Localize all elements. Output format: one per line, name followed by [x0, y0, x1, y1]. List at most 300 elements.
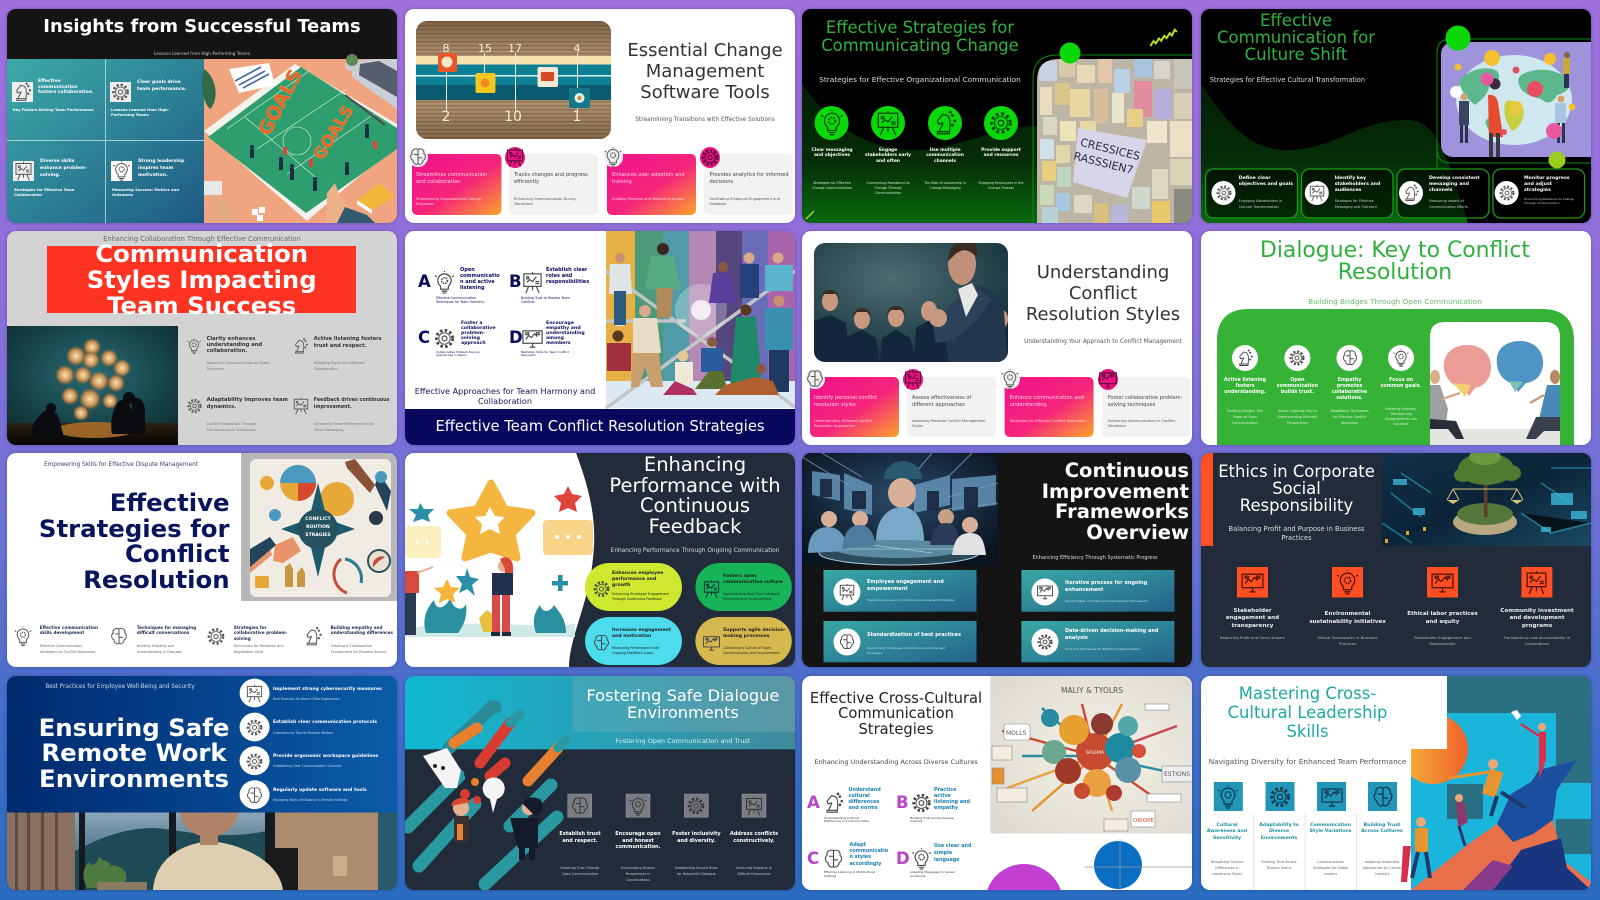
card text: styles: Identify personal conflict: [814, 394, 877, 400]
item: feedback: improvement.: [314, 405, 352, 410]
panel: Fostering Safe Dialogue Environments: for Respectful Dialogue: [677, 872, 716, 876]
image: tree on scales over circuit board: [1201, 453, 1591, 667]
card text: styles: [814, 394, 877, 428]
image: timeline on wooden board: [412, 21, 793, 215]
pill: culture: Implementing Real-Time Feedback: [723, 592, 780, 596]
subtitle: Enhancing Efficiency Through Systematic Progress: [1033, 554, 1157, 560]
item sublabels: The Role of Leadership in: [924, 180, 966, 184]
card text: communication: and collaboration: [416, 178, 460, 184]
item B: empathy: [934, 805, 958, 811]
card text: effectiveness: Assess effectiveness of: [912, 394, 971, 400]
item: channels: Use multiple: [929, 148, 961, 152]
item: clarity: understanding and: [207, 342, 262, 348]
item: clarity: [187, 336, 270, 371]
item sublabels: Communication: [875, 190, 901, 194]
card text: collaboration: Enhancing Communication in Conflict: [1108, 418, 1175, 422]
image: timeline on wooden board: 2: [442, 109, 450, 125]
item: community: and development: [1510, 615, 1564, 621]
item: empathy: Building empathy and: [331, 625, 383, 630]
subtitle: Building Bridges Through Open Communication: [1308, 296, 1482, 306]
item D: Mediation Skills for Team Conflict: [521, 350, 569, 354]
title: [34, 714, 234, 791]
box: data: Tools and Techniques for Effective Implementation: [1065, 647, 1141, 651]
title: Software Tools: [640, 82, 770, 103]
title: [1201, 684, 1414, 741]
title on red box: Team Success: [107, 291, 296, 320]
item: inclusivity: [666, 831, 726, 844]
panel: Fostering Safe Dialogue Environments: Conversations: [626, 878, 650, 882]
item: clarity: Impact of Communication on Team: [207, 361, 269, 365]
item: style variations: Communication: [1310, 822, 1351, 828]
item: common goals: Focus on: [1389, 378, 1413, 383]
item: adaptability: [187, 397, 288, 432]
item B: Building Trust Across Diverse: [910, 816, 953, 820]
item: skills: skills development: [40, 630, 84, 635]
icons on orange squares: [1201, 567, 1591, 598]
item: labor: and equity: [1426, 618, 1459, 624]
item: support: Provide support: [981, 148, 1021, 152]
item: diverse skills: Collaboration: [14, 193, 42, 197]
panel: Ethics in Corporate Social Responsibility: Balancing Profit and Social Impact: [1220, 634, 1285, 640]
image: abstract capsules and two people talking: [405, 676, 795, 890]
panel: Effective Communication for Culture Shift: Cultural Transformation: [1239, 205, 1279, 209]
box: data: Data-driven decision-making and: [1065, 628, 1158, 634]
item A: and norms: [848, 805, 878, 811]
card text: tracking: [514, 172, 588, 206]
panel: Mastering Cross-Cultural Leadership Skills: Navigating Cultural: [1211, 860, 1243, 864]
title: Improvement: [1042, 480, 1189, 502]
panel: Essential Change Management Software Tools: [405, 9, 795, 223]
item: cybersecurity: Best Practices for Home Office Ergonomics: [273, 697, 339, 701]
image: light bulbs installation: [7, 326, 178, 445]
icons on gray squares: [405, 794, 795, 818]
item: ergonomics: Establishing Clear Communication Channels: [273, 764, 341, 768]
title: [1201, 463, 1392, 515]
item A: n and active: [460, 279, 495, 285]
item B: Establish clear: [546, 267, 587, 273]
image: conflict resolution collage: CONFLICT: [305, 516, 332, 522]
box: messaging: messaging and: [1429, 182, 1469, 187]
card text: communication: Streamlining Organizational Change: [416, 196, 481, 200]
title: Understanding: [1037, 262, 1169, 283]
item sublabels: Change Through: [874, 186, 902, 190]
title: Resolution: [83, 564, 230, 594]
item: conflicts: Address conflicts: [730, 831, 778, 837]
title: Feedback: [649, 515, 741, 538]
image: timeline on wooden board: 1: [573, 109, 581, 125]
icons on green circles: [820, 110, 1012, 136]
image: conflict resolution collage: [7, 453, 397, 667]
box: monitoring: [1524, 176, 1574, 205]
item: labor: [1397, 611, 1488, 626]
title: Conflict: [125, 539, 230, 568]
subtitle: Best Practices for Employee Well-Being and Security: [45, 684, 195, 690]
box: iteration: [1065, 571, 1148, 604]
image: teal panel and goals football board: GOALS: [254, 66, 307, 139]
item: clear goals: Performing Teams: [111, 113, 149, 117]
title: Strategies for: [39, 514, 230, 542]
item: software: [273, 788, 367, 803]
title: Enhancing: [644, 453, 746, 476]
item: leadership: Outcomes: [112, 193, 133, 197]
title: Overview: [1086, 520, 1189, 544]
box: standardization: Processes: [867, 651, 882, 655]
title: Resolution Styles: [1026, 304, 1180, 325]
item: clarity: Dynamics: [207, 367, 224, 371]
item: honesty: Encourage open: [615, 831, 661, 837]
item: trust: [1267, 378, 1327, 396]
item: community: programs: [1522, 622, 1552, 628]
panel: Mastering Cross-Cultural Leadership Skills: Differences in: [1215, 866, 1239, 870]
item B: Building Trust to Resolve Team: [521, 296, 570, 300]
item: messaging: Clear messaging: [811, 148, 853, 152]
item: conversations: difficult conversations: [137, 630, 189, 635]
panel: Effective Strategies for Communicating Change: [802, 9, 1192, 223]
item D: Audiences: [910, 874, 926, 878]
item B: roles and: [546, 273, 572, 279]
item B: active: [934, 793, 951, 799]
panel: Dialogue: Key to Conflict Resolution: Perspectives: [1287, 421, 1308, 425]
item C: problem-: [461, 331, 485, 336]
box: messaging: channels: [1429, 188, 1453, 193]
pill: engagement: [589, 625, 679, 661]
card text: adoption: training: [612, 178, 632, 184]
card text: communication: Enhance communication and: [1010, 394, 1084, 400]
image: timeline on wooden board: 17: [508, 42, 522, 55]
box: messaging: Develop consistent: [1429, 176, 1480, 181]
item D: [509, 320, 585, 357]
image: timeline on wooden board: 4: [574, 42, 580, 55]
box: iteration: enhancement: [1065, 587, 1103, 593]
item C: Foster a: [461, 321, 483, 326]
item: diverse skills: Strategies for Effective Team: [14, 188, 74, 192]
image: people climbing geometric mountain: [1201, 676, 1591, 890]
panel: Effective Communication for Culture Shift: Measuring Impact of: [1429, 199, 1464, 203]
item B: [509, 267, 590, 304]
title on red box: Communication: [95, 239, 308, 268]
title: [1026, 262, 1180, 325]
title: Effective Cross-Cultural: [810, 690, 982, 706]
item: adaptability: Conflict Resolution Through: [207, 422, 256, 426]
card text: effectiveness: Styles: [912, 424, 923, 428]
item D: empathy and: [546, 326, 581, 331]
item: protocols: Cybersecurity Tips for Remote Workers: [273, 731, 333, 735]
panel: Mastering Cross-Cultural Leadership Skills: Leaders: [1324, 872, 1337, 876]
item: stakeholders: and often: [876, 159, 900, 164]
subtitle: Balancing Profit and Purpose in Business: [1228, 525, 1364, 533]
box: monitoring: Monitor progress: [1524, 176, 1570, 181]
panel: Ethics in Corporate Social Responsibility: Stakeholder Engagement and: [1414, 634, 1471, 640]
box: engagement: Measuring Success in Continuous Improvement Initiatives: [867, 598, 954, 602]
card text: styles: Resolution Approaches: [814, 424, 855, 428]
title: [627, 40, 783, 103]
item C: approach: [461, 341, 486, 346]
panel: Communication Styles Impacting Team Success: [7, 231, 397, 445]
panel: Dialogue: Key to Conflict Resolution: Communication: [1232, 421, 1258, 425]
item: leadership: Strong leadership: [138, 159, 184, 164]
item sublabels: Strategies for Effective: [813, 180, 851, 184]
item: empathy: [1320, 378, 1380, 402]
box: standardization: Standardization of best practices: [867, 632, 961, 638]
item: adaptability: [1253, 822, 1305, 842]
item: listening: fosters: [1235, 384, 1254, 389]
panel: Mastering Cross-Cultural Leadership Skills: Adapting Leadership: [1365, 860, 1399, 864]
item: clear goals: Clear goals drive: [137, 80, 181, 85]
title: [1201, 240, 1589, 283]
panel: Dialogue: Key to Conflict Resolution: Disagreements into: [1385, 417, 1417, 421]
item: environment: Environmental: [1325, 611, 1370, 617]
item: clarity: collaboration.: [207, 348, 247, 354]
item D: D: [896, 848, 910, 868]
item sublabels: [812, 180, 1024, 194]
item C: n styles: [850, 854, 871, 860]
panel: Mastering Cross-Cultural Leadership Skills: Contexts: [1374, 872, 1390, 876]
item sublabels: Engaging Employees in the: [978, 180, 1024, 184]
item: skills: Effective Communication: [40, 644, 82, 648]
item: protocols: [273, 720, 377, 736]
subtitle: Streamlining Transitions with Effective Solutions: [635, 117, 775, 123]
panel: Effective Communication for Culture Shift: Messaging and Outreach: [1335, 205, 1377, 209]
panel: Effective Communication for Culture Shift: Overcoming Resistance to Change: [1524, 197, 1574, 201]
item: ergonomics: Provide ergonomic workspace guidelines: [273, 754, 378, 759]
card text: communication: [1010, 394, 1086, 422]
item C: communicatio: [850, 848, 888, 854]
image: green panel and speech bubbles: [1201, 231, 1591, 445]
item: community: Community investment: [1500, 608, 1574, 614]
panel: Fostering Safe Dialogue Environments: Perspectives in: [626, 872, 650, 876]
item: skills: Effective communication: [40, 625, 98, 630]
panel: Ethics in Corporate Social Responsibility: Corporations: [1525, 641, 1549, 646]
item D: simple: [934, 850, 952, 856]
item: honesty: and honest: [622, 838, 654, 844]
pill: performance: [589, 571, 679, 607]
title: [572, 687, 793, 721]
item: listening: [1215, 378, 1275, 396]
item A: Differences in Communication: [824, 819, 869, 823]
item: listening: Active listening: [1224, 378, 1266, 383]
card text: analytics: [710, 172, 789, 206]
box: stakeholders: audiences: [1335, 188, 1361, 193]
box: iteration: Iterative process for ongoing: [1065, 580, 1147, 586]
icons on blue squares: [1201, 782, 1411, 811]
subtitle: Fostering Open Communication and Trust: [615, 737, 750, 745]
item: listening: Adapting Styles for Effective: [314, 361, 365, 365]
image: colourful mind map and circles: MOLLS: [1006, 730, 1027, 737]
item: collaboration: fosters collaboration.: [38, 90, 94, 95]
title: Remote Work: [41, 738, 227, 767]
panel: Dialogue: Key to Conflict Resolution: Solutions: [1393, 422, 1409, 426]
item: support: and resources: [983, 153, 1019, 158]
item: stakeholders: Engage: [879, 148, 897, 152]
subtitle: Enhancing Collaboration Through Effective Communication: [103, 235, 301, 243]
image: teal panel and goals football board: [7, 54, 397, 223]
item B: Cultures: [910, 819, 922, 823]
item C: accordingly: [850, 861, 881, 867]
pill: performance: Enhances employee: [612, 571, 663, 576]
subtitle: Strategies for Effective Cultural Transformation: [1210, 76, 1365, 84]
item: listening: Collaboration: [314, 367, 338, 371]
item A: Effective Communication: [436, 296, 476, 300]
item B: B: [896, 792, 909, 812]
pill: performance: Enhancing Employee Engagement: [612, 592, 669, 596]
card text: adoption: [612, 172, 685, 200]
item: clear goals: Lessons Learned from High-: [111, 108, 169, 112]
item A: communicatio: [460, 273, 500, 279]
title: Communication for: [1217, 28, 1375, 47]
item: adaptability: Environments: [1261, 836, 1297, 840]
footer title: Effective Team Conflict Resolution Strategies: [435, 418, 765, 435]
panel: Dialogue: Key to Conflict Resolution: Understanding Different: [1277, 415, 1317, 419]
item: feedback: Feedback drives continuous: [314, 398, 389, 403]
item: messaging: [811, 148, 853, 158]
item A: cultural: [848, 793, 870, 799]
panel: Ethics in Corporate Social Responsibility: [1201, 453, 1591, 667]
item: conversations: Techniques for managing: [137, 625, 196, 630]
item: environment: sustainability initiatives: [1309, 618, 1386, 624]
card text: communication: Strategies for Effective Conflict Resolution: [1010, 418, 1086, 422]
image: colourful mind map and circles: ESTIONS: [1164, 771, 1190, 778]
panel: Enhancing Performance with Continuous Feedback: [405, 453, 795, 667]
item: community: [1492, 608, 1582, 630]
image: colourful mind map and circles: MALIY & TYOLRS: [1061, 686, 1123, 695]
item: awareness: Cultural: [1216, 822, 1238, 828]
item: collaborative: Strategies for: [234, 625, 267, 630]
card text: analytics: Provides analytics for informed: [710, 172, 789, 178]
item C: C: [418, 328, 430, 347]
item: stakeholder: [1207, 608, 1298, 630]
item: inclusivity: and diversity.: [677, 838, 716, 844]
panel: Dialogue: Key to Conflict Resolution: Negotiation Techniques: [1330, 409, 1369, 413]
panel: Dialogue: Key to Conflict Resolution: Resolution: [1341, 421, 1358, 425]
box: objectives: [1238, 176, 1293, 209]
card text: analytics: Feedback: [710, 202, 727, 206]
card text: collaboration: [1108, 394, 1183, 430]
card text: communication: understanding: [1010, 402, 1047, 408]
item C: Approaches in Teams: [436, 353, 467, 357]
subtitle: [1201, 525, 1392, 542]
item A: Understand: [848, 787, 881, 793]
item: stakeholder: Stakeholder: [1233, 608, 1272, 614]
image: green wave and world map with people: [1201, 26, 1591, 223]
card text: tracking: efficiently: [514, 178, 539, 184]
subtitle: Practices: [1281, 534, 1312, 542]
item A: Understanding Cultural: [824, 816, 859, 820]
item B: responsibilities: [546, 279, 589, 285]
card text: collaboration: Foster collaborative problem-: [1108, 394, 1183, 400]
item: common goals: common goals.: [1381, 384, 1421, 389]
image: conflict resolution collage: STRAGIES: [305, 532, 331, 538]
item: listening: understanding.: [1224, 390, 1266, 395]
item A: [802, 787, 897, 825]
title: Cultural Leadership: [1228, 703, 1387, 722]
panel: Fostering Safe Dialogue Environments: Nurturing Empathy in: [736, 866, 772, 870]
pill: agility: making processes: [723, 634, 770, 639]
item: adaptability: Adaptability improves team: [207, 397, 288, 403]
image: timeline on wooden board: 8: [442, 42, 450, 55]
item: honesty: [608, 831, 668, 850]
title: Mastering Cross-: [1239, 684, 1376, 703]
image: star illustration and dark curved panel: [405, 453, 795, 667]
item: empathy: [303, 625, 397, 657]
box: data: [1065, 622, 1158, 652]
title: [7, 490, 230, 592]
item sublabels: Overcoming Resistance to: [866, 180, 910, 184]
title: [1217, 11, 1376, 64]
item D: language: [934, 856, 960, 862]
item C: [418, 320, 496, 357]
panel: Dialogue: Key to Conflict Resolution: for Effective Conflict: [1333, 415, 1366, 419]
pill: agility: Supports agile decision-: [723, 628, 786, 633]
image: green wave and sticky notes wall: [802, 28, 1192, 223]
item: style variations: [1305, 822, 1357, 836]
title on red box: Styles Impacting: [87, 265, 317, 294]
image: green wave and sticky notes wall: CRESSICES: [1079, 136, 1141, 163]
icons in circles: [245, 684, 265, 804]
item: awareness: Sensitivity: [1213, 836, 1241, 840]
card text: collaboration: Situations: [1108, 424, 1126, 428]
pill: engagement: Ongoing Feedback Loops: [612, 651, 653, 655]
box: engagement: [867, 571, 954, 603]
item D: Use clear and: [934, 842, 972, 848]
item A: [418, 267, 500, 304]
item: feedback: [294, 397, 390, 432]
card text: styles: resolution styles: [814, 402, 856, 408]
item: style variations: Style Variations: [1310, 829, 1352, 834]
box: messaging: [1429, 176, 1480, 209]
item: protocols: Establish clear communication protocols: [273, 720, 377, 725]
title: [989, 461, 1189, 543]
item: awareness: [1201, 822, 1253, 842]
item: collaborative: Negotiation Skills: [234, 650, 263, 654]
item: collaboration: Effective: [38, 79, 61, 84]
panel: Effective Communication for Culture Shift: Communication Efforts: [1429, 205, 1468, 209]
panel: Understanding Conflict Resolution Styles: [802, 231, 1192, 445]
item: listening: Active listening fosters: [314, 336, 382, 342]
box: stakeholders: [1334, 176, 1380, 209]
item C: Settings: [824, 874, 836, 878]
item: channels: [926, 148, 964, 164]
card text: effectiveness: [912, 394, 986, 428]
item: adaptability: Diverse: [1269, 829, 1289, 834]
panel: Mastering Cross-Cultural Leadership Skills: Leadership Styles: [1212, 872, 1242, 876]
image: blue header and person at home office: [7, 676, 397, 890]
item: skills: Strategies for Conflict Resolution: [40, 650, 96, 654]
title: Continuous: [640, 494, 750, 517]
title: Ethics in Corporate: [1218, 462, 1375, 481]
pill: engagement: Increases engagement: [612, 628, 671, 633]
item sublabels: Change Process: [988, 186, 1014, 190]
item: adaptability: dynamics.: [207, 404, 236, 410]
title: Responsibility: [1240, 496, 1353, 515]
item C: Collaborative Problem-Solving: [436, 350, 480, 354]
item: skills: [12, 625, 107, 657]
item: clarity: Clarity enhances: [207, 336, 255, 342]
card text: communication: Streamlines communication: [416, 172, 487, 178]
pill: culture: communication culture: [723, 580, 783, 585]
item: adaptability: Adaptability to: [1259, 822, 1299, 828]
item: collaborative: collaborative problem-: [234, 630, 287, 635]
item: diverse skills: solving.: [40, 173, 60, 178]
panel: Mastering Cross-Cultural Leadership Skills: Approaches to Cultural: [1363, 866, 1401, 870]
item: trust: Open: [1290, 378, 1304, 383]
title: Effective: [110, 488, 230, 517]
item: feedback: Clear Messaging: [314, 428, 343, 432]
subtitle: Lessons Learned from High-Performing Teams: [154, 51, 250, 56]
panel: Effective Communication for Culture Shift: Engaging Stakeholders in: [1239, 199, 1282, 203]
item A: A: [807, 792, 820, 812]
box: data: analysis: [1065, 635, 1088, 641]
item: environment: [1302, 611, 1393, 626]
